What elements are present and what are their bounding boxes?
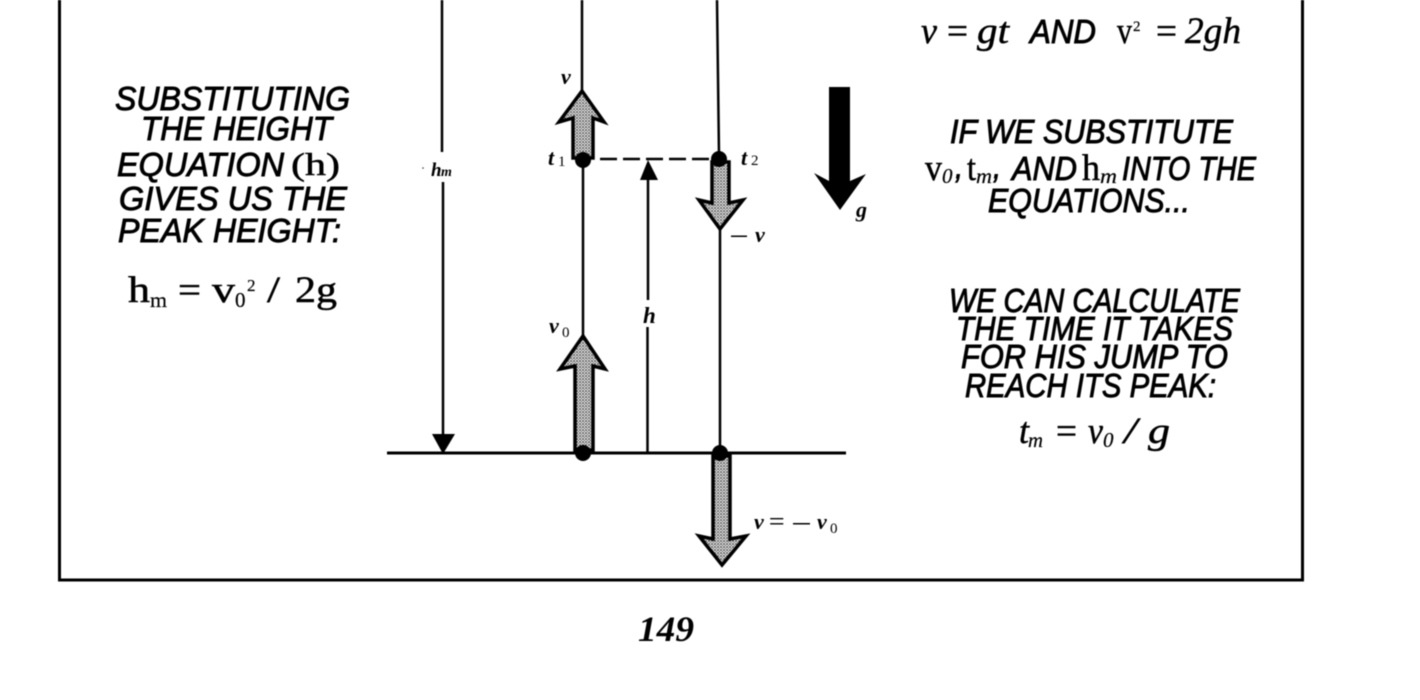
diagram labels: = xyxy=(767,507,786,536)
equation: v = gt and v squared = 2gh: AND xyxy=(1028,13,1096,50)
text: we can calculate: WE CAN CALCULATE xyxy=(949,282,1241,319)
text: if we substitute: v xyxy=(925,148,942,189)
diagram labels: 0 xyxy=(830,521,838,537)
equation: peak height: v xyxy=(212,270,236,311)
equation: v = gt and v squared = 2gh: gt xyxy=(977,11,1011,52)
text: substituting the height equation: GIVES US THE xyxy=(119,180,348,217)
text: if we substitute: 0 xyxy=(942,164,953,188)
diagram labels: v xyxy=(754,509,764,534)
dashed height line xyxy=(600,158,712,160)
diagram labels: 0 xyxy=(562,325,570,341)
diagram labels: h xyxy=(643,303,656,328)
diagram labels: t xyxy=(548,145,555,170)
diagram labels xyxy=(431,64,867,537)
diagram labels: g xyxy=(855,197,867,222)
diagram labels: 1 xyxy=(558,154,566,170)
diagram labels: v xyxy=(549,313,559,338)
text: if we substitute: h xyxy=(1082,148,1100,189)
diagram labels: v xyxy=(561,64,571,89)
text: substituting the height equation: PEAK HEIGHT: xyxy=(118,212,341,249)
text: we can calculate: REACH ITS PEAK: xyxy=(965,367,1216,404)
equation: peak height: 2 xyxy=(247,276,256,295)
arrow: initial velocity v0 xyxy=(560,336,605,450)
text: if we substitute: , xyxy=(955,148,963,185)
text: substituting the height equation: THE HEIGHT xyxy=(141,110,335,147)
equation: peak height: 2g xyxy=(295,270,337,311)
equation: peak height: / xyxy=(267,270,281,311)
equation: peak height xyxy=(128,270,337,312)
text: substituting the height equation: SUBSTITUTING xyxy=(115,80,350,117)
equation: time to peak: 0 xyxy=(1103,428,1114,452)
arrow: peak height hm xyxy=(422,0,455,454)
equation: v = gt and v squared = 2gh: = xyxy=(947,11,968,52)
equation: peak height: m xyxy=(150,288,167,312)
text: if we substitute: EQUATIONS... xyxy=(988,182,1190,219)
text: we can calculate: THE TIME IT TAKES xyxy=(956,310,1233,347)
equation: time to peak: v xyxy=(1088,411,1104,452)
equation: time to peak xyxy=(1019,411,1170,452)
diagram labels: v xyxy=(817,509,827,534)
diagram labels: v xyxy=(755,222,765,247)
equation: v = gt and v squared = 2gh: 2 xyxy=(1133,19,1140,35)
text: if we substitute xyxy=(925,113,1257,219)
text: if we substitute: m xyxy=(976,164,992,188)
text: if we substitute: m xyxy=(1100,164,1117,188)
text: if we substitute: AND xyxy=(1010,150,1077,187)
points on path xyxy=(575,151,728,461)
equation: v = gt and v squared = 2gh: v xyxy=(921,11,938,52)
equation: peak height: 0 xyxy=(235,288,246,312)
equation: v = gt and v squared = 2gh: v xyxy=(1117,11,1132,52)
diagram labels: h xyxy=(431,160,442,181)
text: substituting the height equation xyxy=(115,80,350,249)
equation: time to peak: / xyxy=(1121,411,1142,452)
text: we can calculate: FOR HIS JUMP TO xyxy=(961,338,1228,375)
falling path line xyxy=(717,0,720,452)
diagram labels: t xyxy=(741,145,748,170)
diagram labels: m xyxy=(441,165,452,180)
equation: v = gt and v squared = 2gh xyxy=(921,11,1241,52)
equation: v = gt and v squared = 2gh: = xyxy=(1156,11,1177,52)
text: if we substitute: IF WE SUBSTITUTE xyxy=(950,113,1234,150)
diagram labels: 2 xyxy=(751,153,758,169)
arrow: downward velocity -v xyxy=(699,162,743,229)
arrow: upward velocity v xyxy=(559,91,604,158)
equation: peak height: h xyxy=(128,270,151,311)
arrow: height h xyxy=(640,160,658,453)
equation: peak height: = xyxy=(178,270,201,311)
page number: 149 xyxy=(638,609,694,649)
text: substituting the height equation: EQUATION xyxy=(117,146,284,183)
equation: time to peak: = xyxy=(1056,411,1077,452)
ground line xyxy=(387,452,846,454)
equation: time to peak: g xyxy=(1148,411,1170,452)
text: if we substitute: INTO THE xyxy=(1122,150,1257,187)
arrow: gravity g xyxy=(814,87,866,210)
arrow: final velocity -v0 xyxy=(699,456,746,565)
rising path line xyxy=(582,0,583,335)
text: if we substitute: , xyxy=(993,148,1001,185)
equation: time to peak: m xyxy=(1028,428,1043,452)
text: if we substitute: t xyxy=(967,148,977,189)
equation: time to peak: t xyxy=(1019,411,1031,452)
equation: v = gt and v squared = 2gh: 2gh xyxy=(1185,11,1241,52)
diagram: projectile motion xyxy=(387,0,867,565)
text: substituting the height equation: (h) xyxy=(291,146,340,182)
text: we can calculate xyxy=(949,282,1241,404)
panel frame xyxy=(60,0,1302,580)
